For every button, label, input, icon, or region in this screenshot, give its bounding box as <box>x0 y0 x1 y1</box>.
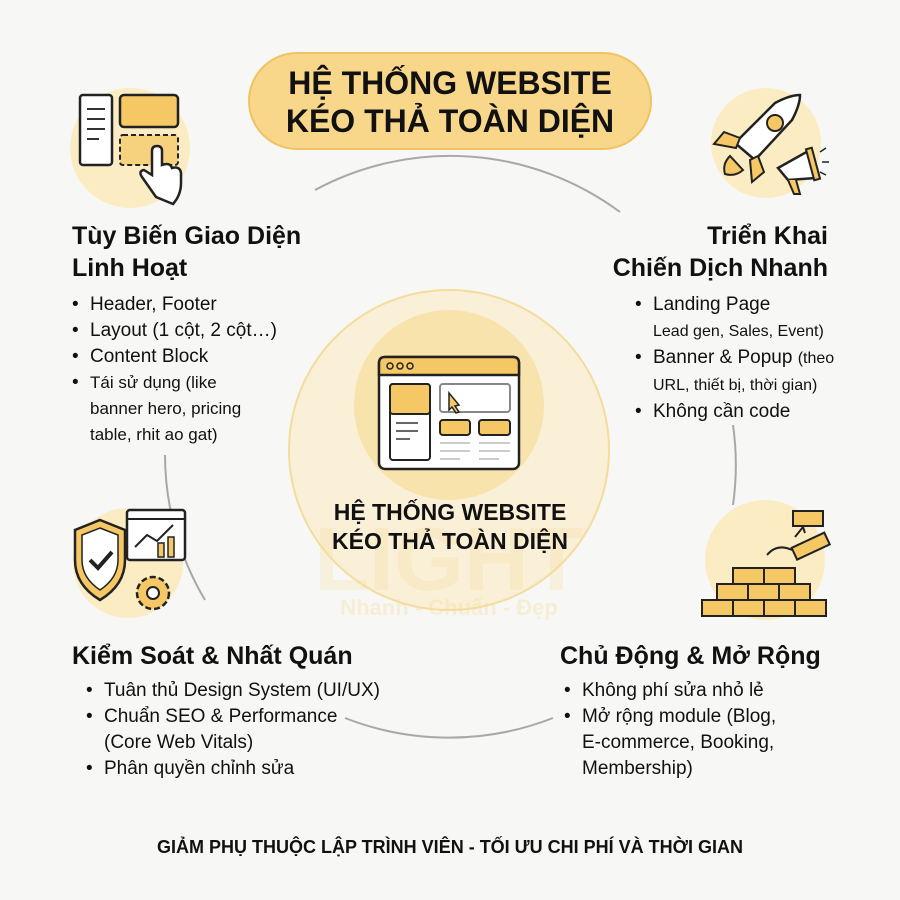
icon: shield and chart <box>73 508 186 618</box>
panel: customize interface: Layout (1 cột, 2 cột…) <box>90 320 277 341</box>
panel: fast campaigns: Chiến Dịch Nhanh <box>613 254 828 282</box>
panel: fast campaigns: Triển Khai <box>707 222 828 250</box>
panel: control and consistency: Kiểm Soát & Nhất Quán <box>72 642 353 670</box>
panel: fast campaigns: URL, thiết bị, thời gian) <box>653 377 817 394</box>
icon: central browser <box>378 356 520 470</box>
panel: control and consistency <box>72 642 380 779</box>
title pill: HỆ THỐNG WEBSITE <box>288 65 612 101</box>
panel: fast campaigns: Banner & Popup (theo <box>653 347 834 368</box>
panel: proactive and scalable: Không phí sửa nhỏ lẻ <box>582 680 764 701</box>
panel: customize interface: Tùy Biến Giao Diện <box>72 222 301 250</box>
panel: control and consistency: Tuân thủ Design System (UI/UX) <box>104 680 380 701</box>
panel: fast campaigns: Lead gen, Sales, Event) <box>653 323 824 340</box>
panel: fast campaigns: Không cần code <box>653 401 790 422</box>
panel: control and consistency: (Core Web Vitals) <box>104 732 253 753</box>
background arcs and central circle: LIGHT <box>314 510 584 610</box>
panel: control and consistency: Phân quyền chỉnh sửa <box>104 758 294 779</box>
title pill <box>248 52 652 150</box>
panel: customize interface <box>72 222 301 444</box>
footer tagline: GIẢM PHỤ THUỘC LẬP TRÌNH VIÊN - TỐI ƯU CHI PHÍ VÀ THỜI GIAN <box>157 837 743 857</box>
panel: fast campaigns: Landing Page <box>653 294 770 315</box>
background arcs and central circle: Nhanh - Chuẩn - Đẹp <box>340 595 558 620</box>
panel: proactive and scalable <box>560 642 821 779</box>
center heading: HỆ THỐNG WEBSITE <box>334 499 566 525</box>
center heading: KÉO THẢ TOÀN DIỆN <box>332 528 568 554</box>
icon: drag and drop layout <box>70 88 190 208</box>
panel: proactive and scalable: Membership) <box>582 758 693 779</box>
panel: proactive and scalable: E-commerce, Booking, <box>582 732 774 753</box>
title pill: KÉO THẢ TOÀN DIỆN <box>286 103 614 139</box>
panel: customize interface: Linh Hoạt <box>72 254 187 282</box>
panel: customize interface: Header, Footer <box>90 294 217 315</box>
panel: proactive and scalable: Mở rộng module (Blog, <box>582 706 776 727</box>
center heading <box>332 499 568 554</box>
panel: control and consistency: Chuẩn SEO & Performance <box>104 706 337 727</box>
panel: customize interface: Content Block <box>90 346 208 367</box>
panel: proactive and scalable: Chủ Động & Mở Rộng <box>560 642 821 670</box>
panel: customize interface: banner hero, pricing <box>90 399 241 418</box>
panel: customize interface: table, rhit ao gat) <box>90 425 218 444</box>
panel: customize interface: Tái sử dụng (like <box>90 373 217 392</box>
panel: fast campaigns <box>613 222 834 422</box>
icon: rocket and megaphone <box>711 88 829 198</box>
icon: bricks <box>701 500 831 620</box>
